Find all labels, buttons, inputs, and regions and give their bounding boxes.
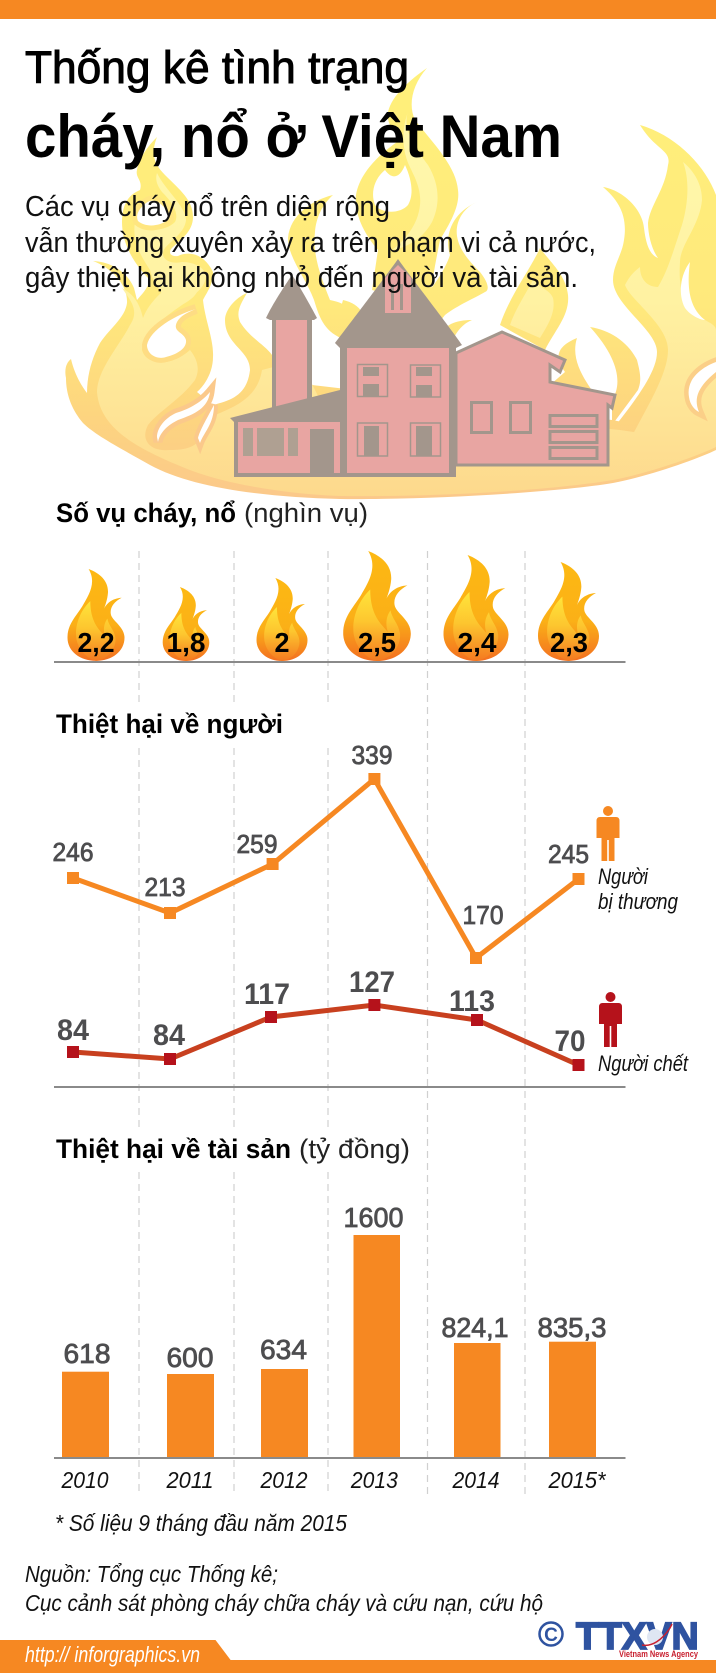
legend: deaths <box>598 992 689 1076</box>
logo: TTXVN <box>540 1616 699 1659</box>
year labels: 2010 <box>61 1467 109 1493</box>
flame 2015 <box>538 562 599 661</box>
intro text: Các vụ cháy nổ trên diện rộng <box>25 191 390 223</box>
lower right window <box>410 423 440 456</box>
flame 2015: 2,3 <box>550 627 588 658</box>
right wing <box>456 332 615 465</box>
line chart: injured: 213 <box>144 872 186 902</box>
line chart: injured: 339 <box>352 740 392 770</box>
line chart: deaths: 84 <box>153 1019 185 1052</box>
legend label deaths: Người chết <box>598 1051 689 1076</box>
illustration: burning flames background <box>65 68 716 499</box>
year labels <box>61 1467 606 1493</box>
copyright mark <box>540 1622 562 1646</box>
line chart: injured: 170 <box>462 900 504 930</box>
bar chart: property damage: 1600 <box>344 1202 404 1233</box>
footnote: * Số liệu 9 tháng đầu năm 2015 <box>55 1510 347 1536</box>
year labels: 2013 <box>350 1467 398 1493</box>
legend label injured: bị thương <box>598 889 679 914</box>
bar chart: property damage <box>54 1202 626 1459</box>
line chart: deaths: 70 <box>554 1025 586 1058</box>
source <box>25 1561 543 1616</box>
heading: human damage: Thiệt hại về người <box>56 709 283 739</box>
line chart: deaths: 84 <box>57 1014 89 1047</box>
upper left window <box>358 364 388 396</box>
flame 2010: 2,2 <box>78 627 114 658</box>
heading: property damage: Thiệt hại về tài sản <box>56 1134 291 1164</box>
illustration: house <box>230 259 615 477</box>
flame 2012: 2 <box>274 627 290 658</box>
upper right window <box>410 365 440 397</box>
flame pictogram chart: fires by year <box>68 551 599 661</box>
copyright mark: C <box>544 1625 558 1646</box>
line chart: deaths: 127 <box>349 966 395 999</box>
line chart: injured: 259 <box>236 829 278 859</box>
heading: number of fires: (nghìn vụ) <box>244 498 368 528</box>
flame 2014: 2,4 <box>458 627 497 658</box>
icon: orange person <box>596 806 620 861</box>
line chart: injured <box>52 740 589 964</box>
title: cháy, nổ ở Việt Nam <box>25 103 562 170</box>
line chart: deaths: 117 <box>244 978 290 1011</box>
bar chart: property damage: 824,1 <box>442 1312 508 1343</box>
source: Nguồn: Tổng cục Thống kê; <box>25 1561 278 1587</box>
human damage axis <box>54 1086 626 1088</box>
intro text: vẫn thường xuyên xảy ra trên phạm vi cả nước, <box>25 226 596 259</box>
flame 2011 <box>163 587 209 661</box>
year labels: 2011 <box>166 1467 214 1493</box>
flame 2014 <box>444 555 508 661</box>
agency name: Vietnam News Agency <box>619 1649 698 1659</box>
bar chart: property damage: 600 <box>166 1342 214 1373</box>
tower <box>266 275 317 408</box>
heading: property damage: (tỷ đồng) <box>299 1134 410 1164</box>
flame 2011: 1,8 <box>166 627 206 658</box>
lower left window <box>358 423 388 456</box>
title <box>25 42 562 170</box>
intro text <box>25 191 596 294</box>
top orange bar <box>0 0 716 19</box>
source: Cục cảnh sát phòng cháy chữa cháy và cứu nạn, cứu hộ <box>25 1590 543 1616</box>
line chart: injured: 246 <box>52 837 94 867</box>
year column dashed separators <box>139 551 525 1495</box>
legend label injured: Người <box>598 864 649 889</box>
bar chart: property damage: 634 <box>260 1334 307 1365</box>
legend label injured <box>598 864 679 914</box>
footer band with url tab <box>0 1640 716 1673</box>
heading: property damage <box>56 1134 410 1164</box>
icon: red person <box>599 992 622 1047</box>
TTXVN wordmark: TTXVN <box>576 1616 699 1658</box>
footer band with url tab: http:// inforgraphics.vn <box>25 1642 200 1667</box>
bar chart: property damage: 618 <box>64 1338 110 1369</box>
line chart: deaths <box>57 966 586 1071</box>
line chart: injured: 245 <box>548 839 589 869</box>
line chart: deaths: 113 <box>449 985 495 1018</box>
main house body <box>335 259 462 477</box>
heading: number of fires <box>56 498 368 528</box>
bar chart: property damage: 835,3 <box>538 1312 606 1343</box>
heading: number of fires: Số vụ cháy, nổ <box>56 498 236 528</box>
fires chart axis <box>54 661 626 663</box>
flame 2012 <box>256 578 308 661</box>
title: Thống kê tình trạng <box>25 42 409 93</box>
globe emblem <box>642 1624 672 1645</box>
flame 2013 <box>343 551 411 661</box>
year labels: 2012 <box>260 1467 308 1493</box>
intro text: gây thiệt hại không nhỏ đến người và tài sản. <box>25 262 578 294</box>
legend: injured <box>596 806 679 914</box>
year labels: 2014 <box>452 1467 500 1493</box>
flame 2013: 2,5 <box>358 627 396 658</box>
flame 2010 <box>68 569 124 661</box>
year labels: 2015* <box>548 1467 606 1493</box>
porch <box>230 390 344 477</box>
